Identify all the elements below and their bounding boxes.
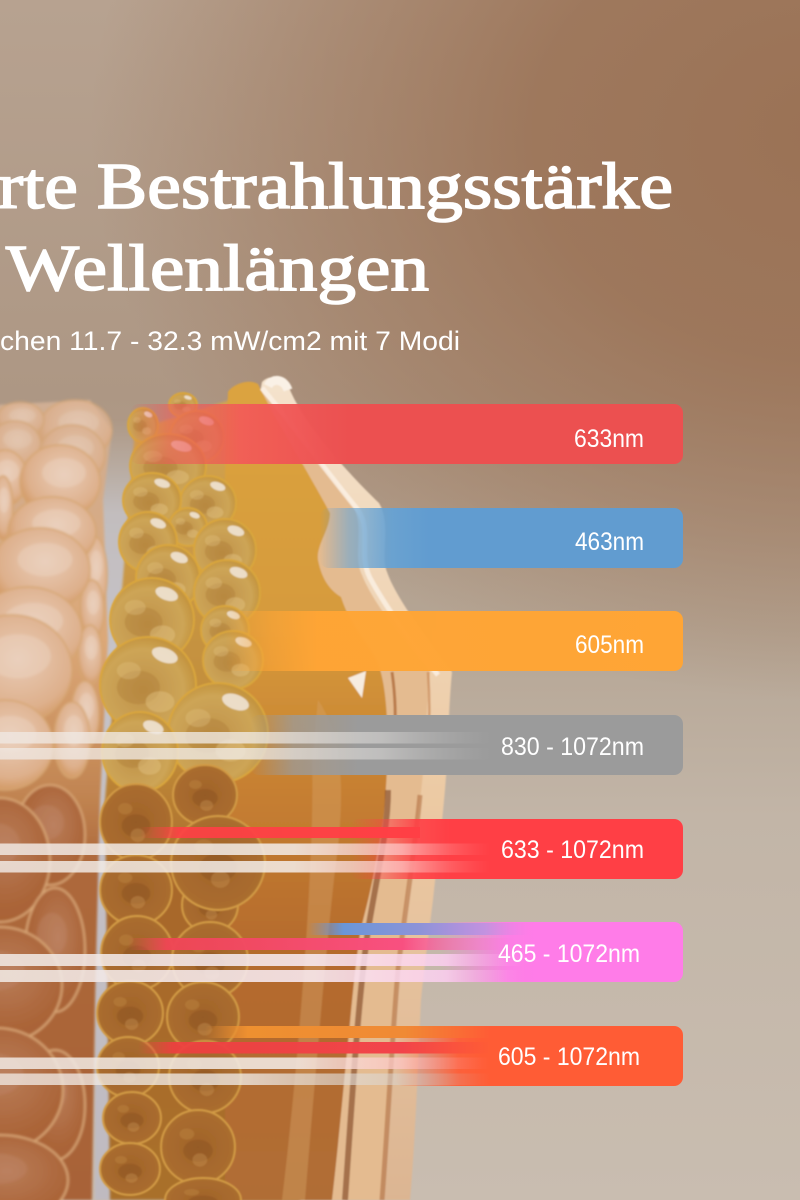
title [0,150,673,305]
mid ribbon [240,385,430,1200]
bar: 633 - 1072nm: 633 - 1072nm [501,836,644,864]
bar: 605nm [225,611,683,671]
bar: 465 - 1072nm [0,922,683,982]
pale gap between bubble columns [95,420,140,1200]
right-side bubble backing [105,400,300,1200]
bar: 463nm: 463nm [575,528,644,556]
bar: 605 - 1072nm [0,1026,683,1086]
product photo: bubbles and amber band [0,377,452,1200]
bar: 830 - 1072nm: 830 - 1072nm [501,733,644,761]
subtitle: chen 11.7 - 32.3 mW/cm2 mit 7 Modi [0,326,460,356]
bar: 633 - 1072nm [0,819,683,879]
bar: 605nm: 605nm [575,631,644,659]
ribbon notch below orange bar [348,671,366,698]
sharp bubble column upper [100,393,268,792]
bar: 633nm: 633nm [574,425,644,453]
left blurred bubble column [0,400,112,1200]
bar: 605 - 1072nm: 605 - 1072nm [498,1043,640,1071]
amber body [225,382,388,1200]
white ribbon highlights [262,388,438,675]
title: rte Bestrahlungsstärke [0,150,673,223]
bar: 830 - 1072nm [0,715,683,775]
bar: 463nm [320,508,683,568]
bar: 633nm [130,404,683,464]
outer cream ribbon [240,377,452,1200]
sharp bubble column lower [97,765,265,1200]
bar: 465 - 1072nm: 465 - 1072nm [498,940,640,968]
dark ribbon edge [345,790,388,1200]
amber soft light streak [282,700,341,1200]
amber band with cream ribbons [225,377,452,1200]
title: Wellenlängen [6,232,429,305]
